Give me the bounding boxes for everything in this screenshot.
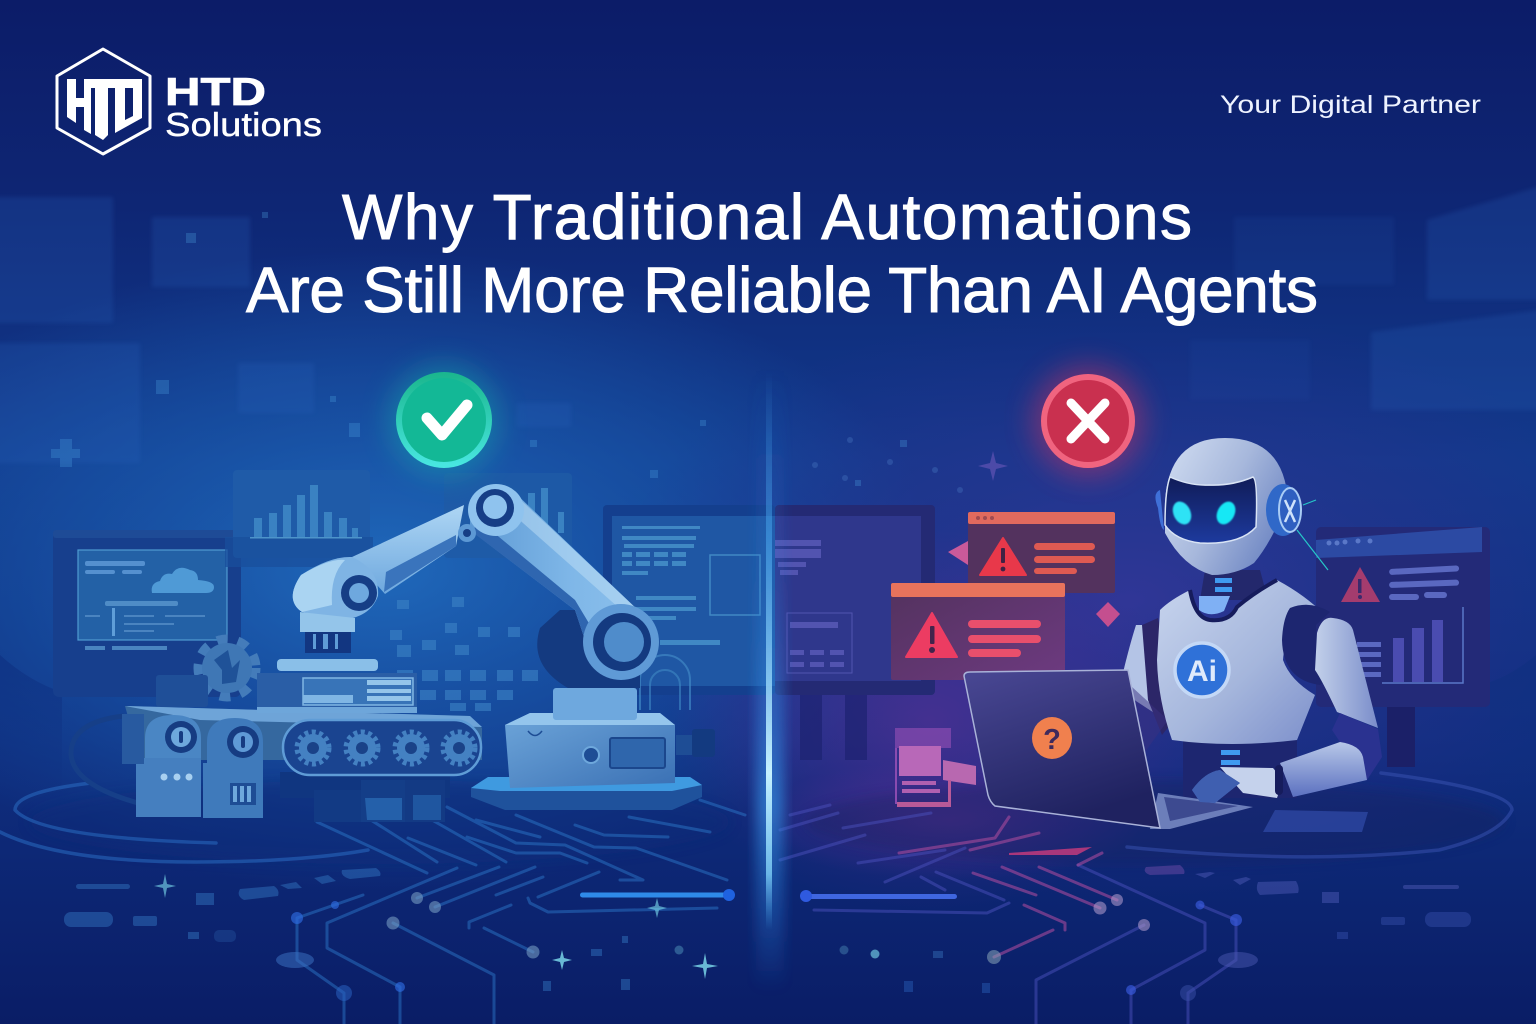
panel: floor circuit traces — [0, 773, 1512, 1024]
arm column — [553, 688, 637, 720]
dial unit 1 — [136, 715, 201, 817]
gear behind machine — [200, 641, 254, 695]
panel: conveyor machine — [71, 641, 482, 822]
logo: wordmark: HTD — [165, 71, 266, 114]
wrist head — [293, 557, 378, 620]
upper arm — [470, 486, 655, 645]
machine side vents — [122, 714, 144, 764]
logo: HTD hexagon mark — [57, 49, 150, 154]
title — [246, 181, 1318, 326]
question mark circle — [1032, 717, 1072, 759]
pink diamond — [1096, 602, 1120, 627]
status: red x badge — [1032, 365, 1144, 477]
arm connector — [676, 729, 715, 757]
conveyor gears — [297, 732, 475, 764]
robot waist — [1183, 738, 1297, 798]
circuit nodes — [276, 892, 1258, 1001]
robot chest badge — [1175, 643, 1229, 697]
robot shoulder — [1282, 605, 1330, 685]
machine legs — [280, 772, 450, 822]
robot headset — [1266, 484, 1328, 570]
dial unit 2 — [203, 718, 263, 818]
forearm — [352, 505, 464, 594]
monitor: data table — [603, 505, 775, 710]
robot eyes — [1169, 498, 1239, 528]
cable — [71, 716, 138, 803]
left dashes — [64, 868, 630, 991]
right circuit lines — [780, 805, 1236, 1024]
shoulder joint — [583, 604, 659, 680]
data tile grid — [390, 597, 538, 711]
right dashes — [904, 865, 1471, 993]
divider: glowing center line — [756, 370, 784, 990]
robot chest badge: Ai — [1187, 655, 1217, 688]
elbow joint — [458, 484, 524, 542]
alert window back — [968, 512, 1115, 593]
robot head — [1155, 438, 1328, 575]
pink circuit lines — [899, 817, 1117, 957]
illustration: robot arm — [293, 484, 715, 810]
monitor: right chart — [1316, 527, 1490, 767]
right floor rings — [1127, 773, 1512, 857]
alert window front — [891, 583, 1065, 680]
status: green check badge — [388, 364, 500, 476]
arm base box — [505, 713, 675, 788]
floor slab — [1263, 810, 1368, 832]
question mark circle: ? — [1043, 724, 1061, 756]
bright right line — [800, 890, 957, 902]
warning triangle — [1341, 567, 1380, 602]
monitor: cloud dashboard — [53, 530, 241, 697]
tagline: Your Digital Partner — [1220, 91, 1481, 119]
title: Why Traditional Automations — [342, 181, 1192, 253]
robot laptop — [964, 670, 1253, 829]
robot neck — [1200, 570, 1268, 600]
left floor rings — [0, 783, 368, 862]
conveyor pill — [283, 720, 481, 775]
left circuit lines — [297, 787, 745, 1024]
arm base plate — [471, 777, 702, 810]
sparkles — [154, 874, 880, 979]
panel: right background monitors — [775, 505, 1490, 807]
logo: wordmark — [165, 71, 322, 143]
monitor: bar chart — [225, 470, 373, 567]
panel: package on conveyor — [257, 659, 417, 713]
machine top surface — [125, 706, 482, 760]
title: Are Still More Reliable Than AI Agents — [246, 254, 1318, 326]
illustration: AI robot — [964, 438, 1382, 829]
panel: floor dashes, nodes and sparkles — [64, 437, 1471, 1001]
pink flag — [1009, 847, 1092, 855]
gripper — [305, 632, 351, 653]
monitor: behind arm chart — [444, 473, 572, 558]
wrist collar — [300, 612, 355, 632]
panel: left background monitors — [53, 470, 775, 711]
robot torso — [1157, 580, 1325, 744]
small pink arrow marker — [948, 541, 968, 565]
robot right arm — [1192, 618, 1382, 803]
bright left line — [580, 889, 735, 901]
document stack — [895, 728, 976, 807]
robot left arm — [1119, 618, 1178, 780]
monitor: behind alerts — [775, 505, 935, 760]
shoulder dark mass — [537, 610, 640, 688]
logo: wordmark: Solutions — [165, 106, 322, 143]
